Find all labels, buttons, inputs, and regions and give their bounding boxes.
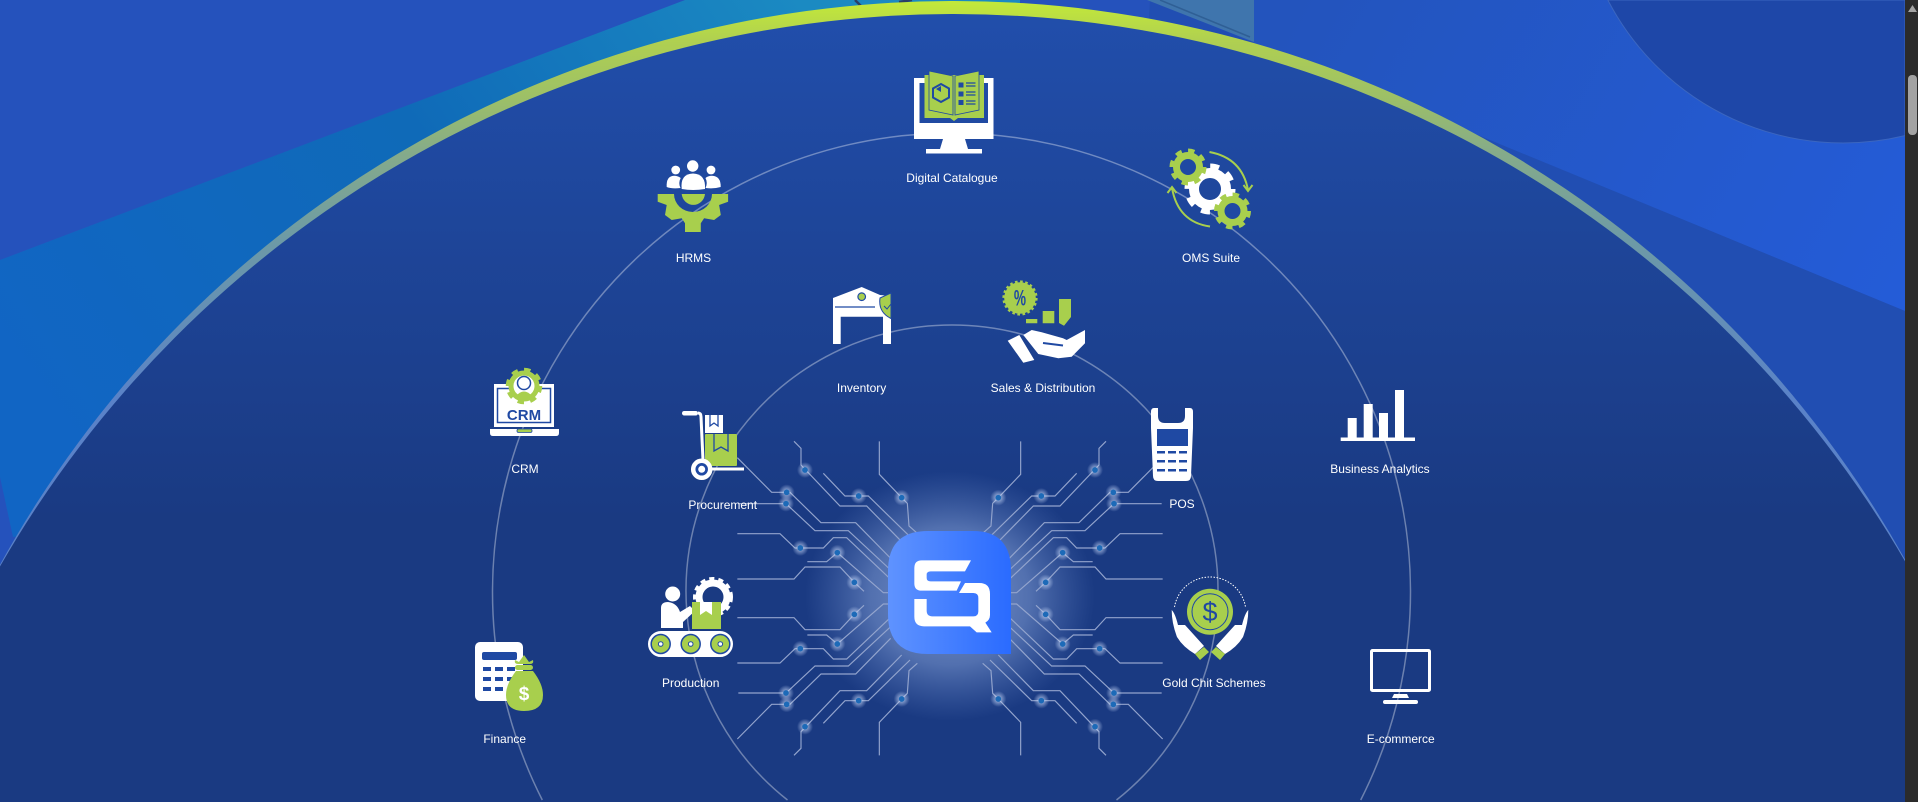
module: Finance <box>475 642 543 746</box>
label: Procurement <box>688 498 758 512</box>
central glow <box>805 471 1095 721</box>
icon: three gears with arrows <box>1168 151 1252 227</box>
module: Production <box>649 579 732 690</box>
icon: warehouse with shield <box>833 287 891 344</box>
module: POS <box>1151 408 1195 511</box>
icon: handheld POS terminal <box>1151 408 1193 481</box>
icon: hand truck with boxes <box>682 411 744 478</box>
module: Procurement <box>682 411 758 512</box>
module: Business Analytics <box>1330 390 1430 476</box>
module: Sales & Distribution <box>991 282 1095 395</box>
background: translucent grey panel <box>1147 0 1254 42</box>
background: teal wedge <box>0 0 1020 537</box>
module: Digital Catalogue <box>906 71 998 185</box>
outer orbit ring <box>492 133 1410 800</box>
module: Gold Chit Schemes <box>1162 577 1266 690</box>
icon: worker at conveyor <box>649 579 732 656</box>
label: Finance <box>483 732 526 746</box>
label: HRMS <box>676 251 711 265</box>
icon: people on gear <box>658 160 728 232</box>
label: Digital Catalogue <box>906 171 998 185</box>
background: top-right circle <box>1608 0 1905 143</box>
module: OMS Suite <box>1168 151 1252 265</box>
background: right bright panel <box>1254 0 1905 311</box>
icon: hands holding coin: $ <box>1202 597 1218 627</box>
label: E-commerce <box>1367 732 1435 746</box>
icon: hand with percent badge and bars: % <box>1014 286 1026 310</box>
icon: bar chart <box>1341 390 1415 441</box>
circuit traces <box>737 441 1163 755</box>
label: Gold Chit Schemes <box>1162 676 1266 690</box>
inner orbit ring <box>686 325 1218 800</box>
label: Production <box>662 676 719 690</box>
label: POS <box>1169 497 1195 511</box>
icon: calculator with money bag: $ <box>519 684 530 705</box>
module: CRM <box>490 370 559 476</box>
label: Inventory <box>837 381 886 395</box>
module: Inventory <box>833 287 891 395</box>
icon: laptop with gear: CRM <box>507 407 541 424</box>
background: darker band below diagonal <box>1100 0 1905 802</box>
label: OMS Suite <box>1182 251 1240 265</box>
module: HRMS <box>658 160 728 265</box>
icon: desktop monitor <box>1372 650 1430 704</box>
icon: central SQ logo <box>888 531 1011 654</box>
label: CRM <box>511 462 539 476</box>
browser scrollbar <box>1905 0 1918 802</box>
label: Business Analytics <box>1330 462 1430 476</box>
label: Sales & Distribution <box>991 381 1095 395</box>
module: E-commerce <box>1367 650 1435 746</box>
icon: monitor with catalogue book <box>914 71 994 154</box>
background: dark marks above the arc <box>855 0 912 6</box>
